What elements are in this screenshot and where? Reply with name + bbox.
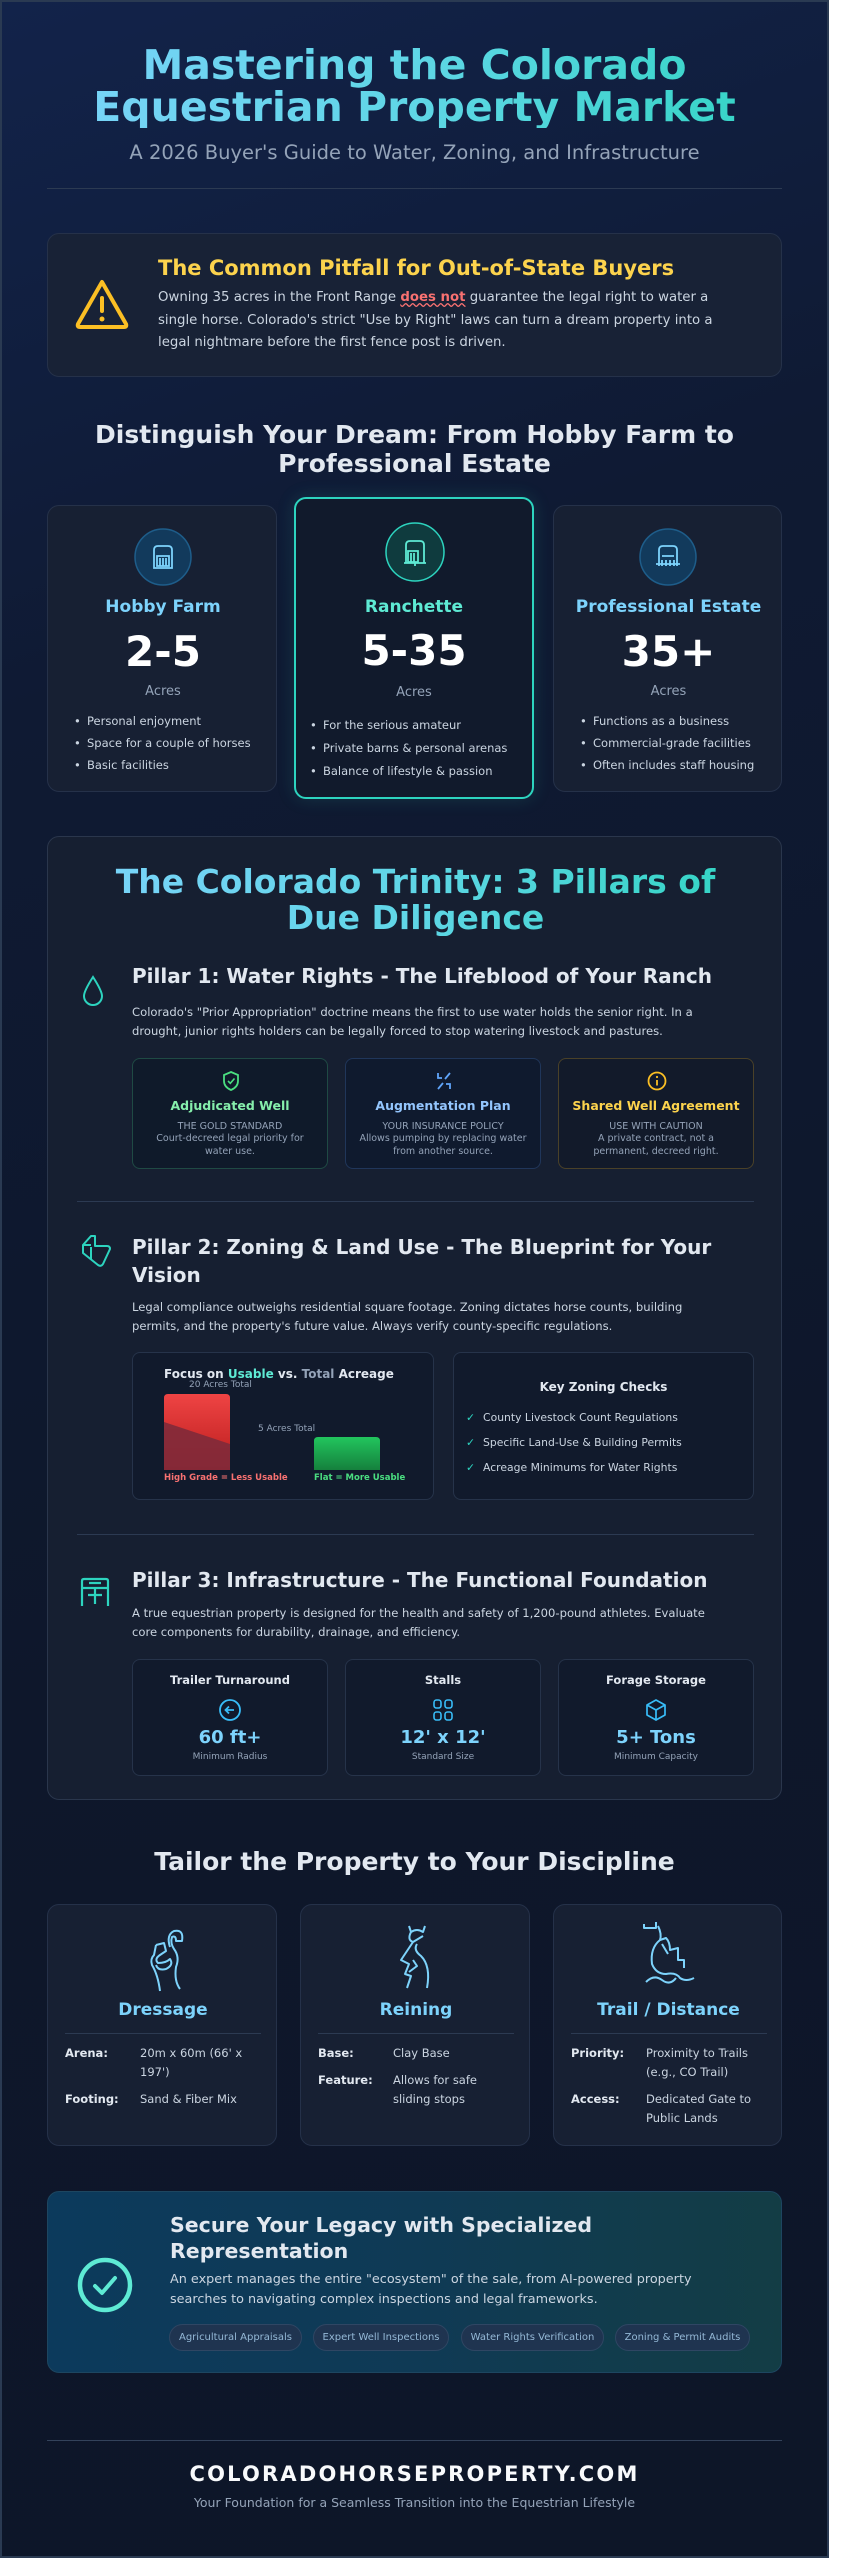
pills: services: Zoning & Permit Audits bbox=[625, 2332, 740, 2343]
icon: warning triangle bbox=[76, 280, 128, 329]
bullets bbox=[580, 714, 754, 772]
heading: distinguish your dream: Distinguish Your Dream: From Hobby Farm to bbox=[95, 420, 734, 449]
bullets: Basic facilities bbox=[87, 758, 169, 772]
heading: tailor the property: Tailor the Property to Your Discipline bbox=[154, 1847, 675, 1876]
bullets: • bbox=[580, 758, 587, 772]
card: augmentation plan: Allows pumping by replacing water bbox=[359, 1133, 527, 1144]
card: adjudicated well bbox=[132, 1058, 328, 1169]
pillar 2 heading bbox=[132, 1235, 712, 1287]
icon: barn bbox=[639, 528, 697, 586]
specs: Proximity to Trails bbox=[646, 2046, 748, 2060]
pillar 2 heading: Pillar 2: Zoning & Land Use - The Blueprint for Your bbox=[132, 1235, 711, 1259]
specs bbox=[65, 2046, 242, 2106]
pillar 2 heading: Vision bbox=[132, 1263, 201, 1287]
pillar 3 text bbox=[132, 1606, 705, 1639]
card: shared well agreement bbox=[558, 1058, 754, 1169]
panel: ranchette: Acres bbox=[396, 685, 432, 700]
specs bbox=[571, 2046, 751, 2125]
specs: Feature: bbox=[318, 2073, 373, 2087]
panel: key zoning checks bbox=[453, 1352, 754, 1500]
card: shared well agreement: Shared Well Agreement bbox=[572, 1098, 740, 1113]
panel: colorado trinity bbox=[47, 836, 782, 1800]
panel: key zoning checks: Key Zoning Checks bbox=[540, 1380, 667, 1394]
card: shared well agreement: permanent, decreed right. bbox=[593, 1146, 719, 1157]
panel: key zoning checks: ✓ County Livestock Count Regulations bbox=[466, 1411, 678, 1424]
pitfall heading: The Common Pitfall for Out-of-State Buyers bbox=[158, 256, 674, 280]
bullets: Commercial-grade facilities bbox=[593, 736, 751, 750]
trinity title bbox=[48, 864, 783, 936]
card: shared well agreement: USE WITH CAUTION bbox=[609, 1121, 703, 1132]
footer tagline: Your Foundation for a Seamless Transition into the Equestrian Lifestyle bbox=[194, 2495, 635, 2510]
bullets: • bbox=[74, 736, 81, 750]
chart: usable vs total acreage: High Grade = Less Usable bbox=[164, 1473, 288, 1483]
panel: professional estate bbox=[553, 505, 782, 792]
panel: professional estate: Acres bbox=[651, 684, 686, 699]
card: stalls: 12' x 12' bbox=[400, 1727, 486, 1748]
pillar 3 text: A true equestrian property is designed for the health and safety of 1,200-pound athletes. Evaluate bbox=[132, 1606, 705, 1620]
icon: reining horse bbox=[400, 1926, 430, 1988]
bullets: • bbox=[580, 736, 587, 750]
specs: sliding stops bbox=[393, 2092, 465, 2106]
number: 5-35 bbox=[361, 626, 467, 675]
number: 35+ bbox=[622, 627, 715, 676]
icon: info bbox=[648, 1072, 666, 1090]
icon: dressage horse bbox=[150, 1930, 184, 1992]
panel: common pitfall bbox=[47, 233, 782, 377]
card: trailer turnaround: Trailer Turnaround bbox=[170, 1673, 290, 1687]
specs: Arena: bbox=[65, 2046, 108, 2060]
icon: infrastructure bbox=[80, 1578, 110, 1606]
card: trailer turnaround bbox=[132, 1659, 328, 1776]
cta heading bbox=[170, 2213, 592, 2263]
bullets: • bbox=[310, 718, 317, 732]
label: Ranchette bbox=[365, 597, 463, 617]
specs: Priority: bbox=[571, 2046, 624, 2060]
icon: check circle bbox=[78, 2258, 132, 2312]
panel: hobby farm bbox=[47, 505, 277, 792]
pillar 1 bbox=[83, 964, 712, 1038]
bullets: Functions as a business bbox=[593, 714, 729, 728]
trinity title: The Colorado Trinity: 3 Pillars of bbox=[116, 862, 715, 901]
cta text bbox=[170, 2272, 692, 2306]
card: augmentation plan bbox=[345, 1058, 541, 1169]
chart: usable vs total acreage: Flat = More Usable bbox=[314, 1473, 405, 1483]
specs: Public Lands bbox=[646, 2111, 718, 2125]
chart: usable vs total acreage: 20 Acres Total bbox=[189, 1380, 252, 1390]
label: Dressage bbox=[118, 2000, 208, 2020]
icon: trail horse bbox=[643, 1922, 694, 1984]
card: forage storage bbox=[558, 1659, 754, 1776]
card: stalls bbox=[345, 1659, 541, 1776]
heading: distinguish your dream bbox=[95, 420, 734, 478]
pills: services: Agricultural Appraisals bbox=[179, 2332, 292, 2343]
specs: Access: bbox=[571, 2092, 620, 2106]
pills: services: Water Rights Verification bbox=[471, 2332, 594, 2343]
panel: dressage bbox=[47, 1904, 277, 2146]
bar: 20 acres red bbox=[164, 1394, 230, 1470]
label: Trail / Distance bbox=[597, 2000, 740, 2020]
subtitle: A 2026 Buyer's Guide to Water, Zoning, and Infrastructure bbox=[129, 141, 700, 164]
pillar 3 bbox=[80, 1568, 707, 1639]
icon: barn bbox=[385, 522, 445, 582]
specs: Allows for safe bbox=[393, 2073, 477, 2087]
pitfall text bbox=[158, 290, 713, 350]
pillar 1 text: Colorado's "Prior Appropriation" doctrine means the first to use water holds the senior right. In a bbox=[132, 1005, 693, 1019]
pillar 2 text bbox=[132, 1300, 682, 1333]
specs: Footing: bbox=[65, 2092, 119, 2106]
panel: reining bbox=[300, 1904, 530, 2146]
title bbox=[0, 44, 829, 128]
pills: services bbox=[169, 2324, 750, 2351]
heading: distinguish your dream: Professional Estate bbox=[278, 449, 551, 478]
bullets: • bbox=[74, 758, 81, 772]
pillar 1 text bbox=[132, 1005, 693, 1038]
cta heading: Representation bbox=[170, 2239, 348, 2263]
chart: usable vs total acreage: Focus on Usable vs. Total Acreage bbox=[164, 1367, 394, 1381]
card: trailer turnaround: Minimum Radius bbox=[193, 1752, 267, 1762]
card: shared well agreement: A private contract, not a bbox=[598, 1133, 714, 1144]
icon: arrows bbox=[437, 1072, 451, 1090]
cta heading: Secure Your Legacy with Specialized bbox=[170, 2213, 592, 2237]
bullets: • bbox=[74, 714, 81, 728]
pillar 1 heading: Pillar 1: Water Rights - The Lifeblood of Your Ranch bbox=[132, 964, 712, 988]
card: adjudicated well: Court-decreed legal priority for bbox=[156, 1133, 304, 1144]
card: forage storage: Forage Storage bbox=[606, 1673, 706, 1687]
bullets: • bbox=[310, 741, 317, 755]
specs bbox=[318, 2046, 477, 2106]
trinity title: Due Diligence bbox=[287, 898, 544, 937]
card: adjudicated well: water use. bbox=[205, 1146, 255, 1157]
pillar 1 text: drought, junior rights holders can be legally forced to stop watering livestock and pastures. bbox=[132, 1024, 663, 1038]
card: stalls: Standard Size bbox=[412, 1752, 474, 1762]
title: Equestrian Property Market bbox=[93, 83, 736, 131]
specs: (e.g., CO Trail) bbox=[646, 2065, 728, 2079]
pillar 2 text: permits, and the property's future value. Always verify county-specific regulations. bbox=[132, 1319, 612, 1333]
label: Reining bbox=[380, 2000, 452, 2020]
bullets: For the serious amateur bbox=[323, 718, 461, 732]
specs: Base: bbox=[318, 2046, 354, 2060]
number: 2-5 bbox=[125, 627, 201, 676]
cta text: An expert manages the entire "ecosystem" of the sale, from AI-powered property bbox=[170, 2272, 692, 2287]
pillar 3 heading: Pillar 3: Infrastructure - The Functional Foundation bbox=[132, 1568, 707, 1592]
pitfall text: single horse. Colorado's strict "Use by Right" laws can turn a dream property into a bbox=[158, 313, 713, 328]
bullets: Balance of lifestyle & passion bbox=[323, 764, 492, 778]
card: forage storage: 5+ Tons bbox=[616, 1727, 696, 1748]
card: stalls: Stalls bbox=[425, 1673, 461, 1687]
bullets: • bbox=[580, 714, 587, 728]
card: adjudicated well: Adjudicated Well bbox=[170, 1098, 290, 1113]
card: augmentation plan: from another source. bbox=[393, 1146, 493, 1157]
pitfall text: Owning 35 acres in the Front Range does not guarantee the legal right to water a bbox=[158, 290, 708, 305]
card: adjudicated well: THE GOLD STANDARD bbox=[178, 1121, 282, 1132]
footer brand: COLORADOHORSEPROPERTY.COM bbox=[189, 2462, 640, 2486]
specs: Dedicated Gate to bbox=[646, 2092, 751, 2106]
card: augmentation plan: YOUR INSURANCE POLICY bbox=[382, 1121, 504, 1132]
label: Hobby Farm bbox=[105, 597, 221, 617]
card: trailer turnaround: 60 ft+ bbox=[199, 1727, 261, 1748]
pillar 3 text: core components for durability, drainage, and efficiency. bbox=[132, 1625, 460, 1639]
icon: shield bbox=[223, 1071, 239, 1091]
label: Professional Estate bbox=[576, 597, 761, 617]
bullets bbox=[310, 718, 507, 778]
bullets bbox=[74, 714, 251, 772]
bullets: • bbox=[310, 764, 317, 778]
pills: services: Expert Well Inspections bbox=[322, 2332, 440, 2343]
specs: 20m x 60m (66' x 197') bbox=[140, 2046, 242, 2079]
pillar 2 text: Legal compliance outweighs residential square footage. Zoning dictates horse counts, building bbox=[132, 1300, 682, 1314]
card: forage storage: Minimum Capacity bbox=[614, 1752, 698, 1762]
icon: barn bbox=[134, 528, 192, 586]
bullets: Personal enjoyment bbox=[87, 714, 201, 728]
bullets: Private barns & personal arenas bbox=[323, 741, 507, 755]
title: Mastering the Colorado bbox=[142, 41, 687, 89]
pitfall text: legal nightmare before the first fence post is driven. bbox=[158, 335, 506, 350]
cta text: searches to navigating complex inspections and legal frameworks. bbox=[170, 2292, 598, 2306]
specs: Clay Base bbox=[393, 2046, 450, 2060]
chart: usable vs total acreage: 5 Acres Total bbox=[258, 1424, 315, 1434]
panel: ranchette bbox=[294, 497, 534, 799]
icon: hand/sign bbox=[82, 1235, 111, 1267]
panel: hobby farm: Acres bbox=[145, 684, 181, 699]
chart: usable vs total acreage bbox=[132, 1352, 434, 1500]
panel: key zoning checks: ✓ Acreage Minimums for Water Rights bbox=[466, 1461, 677, 1474]
card: augmentation plan: Augmentation Plan bbox=[375, 1098, 511, 1113]
specs: Sand & Fiber Mix bbox=[140, 2092, 237, 2106]
bullets: Often includes staff housing bbox=[593, 758, 754, 772]
panel: key zoning checks: ✓ Specific Land-Use & Building Permits bbox=[466, 1436, 682, 1449]
panel: trail distance bbox=[553, 1904, 782, 2146]
icon: water drop bbox=[83, 975, 103, 1006]
pillar 2 bbox=[82, 1235, 712, 1333]
bar: 5 acres green bbox=[314, 1437, 380, 1470]
panel: call to action bbox=[47, 2191, 782, 2373]
bullets: Space for a couple of horses bbox=[87, 736, 251, 750]
